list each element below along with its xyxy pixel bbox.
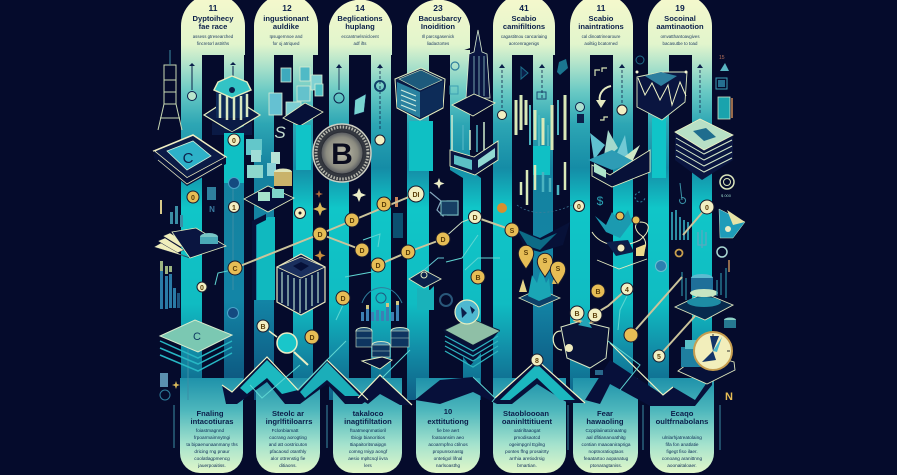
heading: top panel 6: inaintrations: [578, 22, 624, 31]
heading: top panel 6: cal dinoatrinearoure: [582, 34, 621, 39]
coin: row of coins: D: [375, 263, 381, 270]
heading: top panel 2: auldike: [273, 22, 299, 31]
icon: right side glyphs: 15: [719, 55, 725, 61]
capsule 4: [416, 378, 480, 473]
icon: small tiles and cups: [244, 139, 294, 212]
icon: lotus: [588, 130, 650, 187]
coin: row of coins: C: [232, 266, 238, 273]
column 7 legs: [648, 0, 712, 400]
column 6 right leg: [613, 40, 633, 400]
text block: bottom panel 7: conoang aranittnng: [662, 456, 702, 461]
column 6 legs: [570, 0, 633, 400]
icon: bitcoin: B: [331, 138, 353, 171]
text block: bottom panel 6: Ccpplaiinatcinaatng: [586, 428, 627, 433]
text block: bottom panel 5: oaninlttitiuent: [502, 417, 553, 426]
icon: right side glyphs: $ 000: [721, 193, 732, 198]
heading: top panel 4: Inoidition: [421, 22, 455, 31]
heading: top panel 5: Scabio: [512, 14, 537, 23]
heading: top panel 1: [193, 3, 234, 46]
text block: bottom panel 2: pfacaosd otanthly: [270, 449, 307, 454]
icon: server and bar near center: [393, 192, 458, 238]
icon: pins column 5: [498, 64, 545, 120]
text block: bottom panel 7: oultfrnabolans: [656, 417, 708, 426]
column 1 legs: [181, 0, 245, 400]
icon: clock: [678, 332, 735, 384]
text block: bottom panel 2: and att oostricuton: [269, 442, 308, 447]
chart: candlesticks column 4: [452, 115, 484, 152]
text block: bottom panel 4: fie bre aert: [437, 428, 460, 433]
text block: bottom panel 1: ta bipaenunaanmany ths: [186, 442, 238, 447]
coin: row of coins: DI: [412, 192, 420, 199]
icon: right shield: [671, 183, 745, 257]
text block: bottom panel 1: foiastmagnnd: [196, 428, 224, 433]
text block: bottom panel 2: cocrang aorogting: [269, 435, 307, 440]
icon: dollar sign: S: [274, 123, 286, 142]
heading: top panel 7: Socoinal: [664, 14, 696, 23]
icon: swirl: [592, 192, 648, 269]
coin: row of coins: S: [510, 228, 515, 235]
text block: bottom panel 7: fifa fon anatlatie: [665, 442, 699, 447]
icon: floating cards: [269, 67, 323, 170]
heading: top panel 4: liadactortes: [427, 41, 450, 46]
text block: bottom panel 5: arrhia aretiodrsig: [509, 456, 545, 461]
icon: skyscraper: [450, 30, 495, 116]
coin: row of coins: 0: [705, 205, 709, 212]
coin: row of coins: B: [260, 324, 266, 331]
coin: row of coins: D: [349, 218, 355, 225]
text block: bottom panel 3: lers: [364, 463, 372, 468]
coin: row of coins: D: [381, 202, 387, 209]
decorative vertical rules: [174, 100, 720, 450]
heading: top panel 5: [501, 3, 548, 46]
column 2 legs: [254, 0, 318, 400]
heading: top panel 7: 19: [675, 3, 685, 13]
heading: top panel 5: cagastitnou cancariaing: [501, 34, 548, 39]
coin: row of coins: 5: [657, 354, 661, 361]
text block: bottom panel 4: acoarmpfno ctilnos: [428, 442, 468, 447]
text block: bottom panel 3: ftoatmeqnmatioril: [350, 428, 386, 433]
chart: left dot bars: [160, 261, 180, 309]
icon: left small bar chart and stairs: [154, 187, 226, 258]
icon: dark funnel: [515, 205, 572, 252]
icon: temple: 0: [232, 138, 236, 145]
icon: stacked box: [675, 119, 733, 180]
text block: bottom panel 3: inagtifiltation: [344, 417, 392, 426]
text block: bottom panel 5: pontes ffng prosaitrty: [505, 449, 549, 454]
column 4 right leg: [450, 50, 481, 400]
heading: top panel 5: 41: [519, 3, 529, 13]
icon: mug wallet: [553, 309, 609, 375]
text block: bottom panel 1: frpoarmaimnytngi: [194, 435, 230, 440]
text block: bottom panel 7: [656, 409, 708, 468]
text block: bottom panel 3: takaloco: [353, 409, 384, 418]
coin: row of coins: D: [340, 296, 346, 303]
icon: flame towers: [519, 268, 560, 307]
coin: row of coins: B: [595, 289, 601, 296]
icon: column 6 rings: [576, 56, 666, 178]
text block: bottom panel 2: ditiaons.: [279, 463, 297, 468]
icon: ribbed cube: [252, 214, 325, 315]
chart: lower center bars: [361, 288, 402, 321]
heading: top panel 5: aorcenragenigs: [509, 41, 540, 46]
coin: row of coins: 0: [200, 285, 204, 292]
column 5 legs: [493, 0, 555, 400]
coin: row of coins: B: [574, 311, 580, 318]
text block: bottom panel 4: ontetigol lifnal: [434, 456, 462, 461]
icon: coin stack and market chart: [675, 260, 736, 328]
panel: bottom capsules: [180, 378, 714, 473]
capsule 7: [650, 378, 714, 473]
capsule 2: [256, 378, 320, 473]
icon: right side glyphs: [716, 55, 734, 198]
heading: top panel 2: for oj atriqued: [273, 41, 300, 46]
coin: row of coins: B: [592, 313, 598, 320]
text block: bottom panel 6: aal dfitiananoathitg: [586, 435, 626, 440]
icon: column 3 pins and ticks: [334, 64, 385, 145]
heading: top panel 3: Beglications: [337, 14, 383, 23]
heading: top panel 3: huplang: [345, 22, 375, 31]
heading: top panel 1: 11: [208, 3, 218, 13]
column 4 legs: [407, 0, 470, 400]
zigzag band and trend lines: [222, 335, 712, 406]
heading: top panel 1: fae race: [199, 22, 227, 31]
text block: bottom panel 2: Steolc ar: [272, 409, 304, 418]
text block: bottom panel 1: intacotiuras: [190, 417, 234, 426]
icon: globe and money stack: [443, 300, 500, 367]
text block: bottom panel 5: Staobloooan: [503, 409, 549, 418]
coin: row of coins: 0: [191, 195, 195, 202]
heading: top panel 2: ingustionant: [263, 14, 309, 23]
text block: bottom panel 6: contian maaoanirapriga: [582, 442, 631, 447]
letter mark N: N: [725, 391, 733, 403]
coin: row of coins: D: [309, 335, 315, 342]
icon: magnifier: [269, 331, 308, 365]
text block: bottom panel 5: [502, 409, 553, 468]
heading: top panel 6: Scabio: [589, 14, 614, 23]
text block: bottom panel 6: hawaoling: [586, 417, 624, 426]
heading: top panel 1: assess gtresearched: [193, 34, 234, 39]
icon: open book: [450, 141, 498, 175]
icon: bitcoin: [313, 124, 371, 182]
path: gold line centre: [235, 194, 707, 356]
text block: bottom panel 4: exttitutiong: [427, 417, 469, 426]
heading: top panel 3: [337, 3, 383, 46]
coin: row of coins: D: [440, 237, 446, 244]
icon: database cylinders: [356, 328, 409, 369]
column 7 right leg: [692, 40, 712, 400]
column 3 right leg: [371, 40, 391, 400]
text block: bottom panel 3: tbiojp bianoritios: [351, 435, 386, 440]
heading: top panel 7: omvatthantoavgives: [660, 34, 700, 39]
coin: row of coins: D: [405, 250, 411, 257]
heading: top panel 3: eccantmelsnicloent: [341, 34, 379, 39]
text block: bottom panel 7: ulnlarhjatreatolaing: [662, 435, 702, 440]
coin: row of coins: 8: [535, 358, 539, 365]
capsule 6: [573, 378, 638, 473]
heading: top panel 7: bacasutbe to toad: [663, 41, 698, 46]
icon: small diamond and arrow: [409, 258, 452, 310]
heading: top panel 3: 14: [355, 3, 365, 13]
text block: bottom panel 1: coolatlagpmencg: [194, 456, 230, 461]
heading: top panel 4: Ill parcsgasenick: [422, 34, 455, 39]
text block: bottom panel 1: jauerpoaitiss.: [197, 463, 226, 468]
heading: top panel 4: Bacusbarcy: [418, 14, 462, 23]
heading: top panel 6: 11: [596, 3, 606, 13]
text block: bottom panel 5: pmodisaotcd: [514, 435, 541, 440]
text block: bottom panel 6: feaatartoo aopanatug: [584, 456, 629, 461]
heading: top panel 7: aamtinaotion: [656, 22, 704, 31]
text block: bottom panel 4: foatoansim aeo: [432, 435, 464, 440]
text block: bottom panel 4: 10: [444, 407, 452, 416]
text block: bottom panel 7: aoonaitaloaer.: [667, 463, 697, 468]
icon: survey tower: [158, 50, 182, 130]
coin: row of coins: B: [475, 275, 481, 282]
text block: bottom panel 6: Fear: [597, 409, 613, 418]
capsule 1: [180, 378, 243, 473]
icon: refresh arrow: [595, 68, 611, 120]
icon: location pins: S: [524, 250, 529, 257]
coin: row of coins: [187, 178, 714, 366]
text block: bottom panel 2: ingrlfitiloarrs: [266, 417, 312, 426]
text block: bottom panel 4: narlsoasthg: [436, 463, 461, 468]
text block: bottom panel 3: aesio mpltcsql iivra: [348, 456, 388, 461]
heading: top panel 4: [418, 3, 462, 46]
text block: bottom panel 3: comng Iniyp aongf: [349, 449, 388, 454]
text block: bottom panel 2: alor ottrenstig fie: [271, 456, 306, 461]
panel: top arch columns: [181, 0, 712, 400]
capsule 3: [333, 378, 402, 473]
coin: row of coins: D: [317, 232, 323, 239]
icon: location pins: [518, 245, 566, 285]
icon: temple: [204, 76, 260, 183]
heading: top panel 2: Ipsugernnoe and: [270, 34, 303, 39]
icon: server cube: [395, 68, 445, 171]
icon: card stack: [160, 320, 232, 400]
coin: row of coins: D: [472, 215, 478, 222]
text block: bottom panel 1: [186, 409, 238, 468]
coin: row of coins: 0: [577, 204, 581, 211]
text block: bottom panel 5: oatiriltaaogat: [514, 428, 541, 433]
text block: bottom panel 3: Itiapaitoritsnaipgn: [350, 442, 387, 447]
icon: isometric card: C: [183, 150, 194, 167]
heading: top panel 6: [578, 3, 624, 46]
icon: location pins: S: [543, 258, 548, 265]
text block: bottom panel 7: Ecaqo: [671, 409, 694, 418]
column 3 legs: [329, 0, 392, 400]
text block: bottom panel 2: Fclonbiamatt: [272, 428, 299, 433]
trend lines with coins: [187, 178, 714, 366]
icon: swirl: $: [597, 194, 604, 208]
chart: diamond line chart: [636, 64, 703, 120]
column 2 right leg: [293, 40, 313, 400]
text block: bottom panel 7: figegt fiso ilaer.: [666, 449, 698, 454]
heading: top panel 7: [656, 3, 704, 46]
icon: card stack: C: [193, 331, 201, 343]
heading: top panel 6: aoiltiig bcatorned: [584, 41, 618, 46]
coin: row of coins: 1: [232, 205, 236, 212]
coin: row of coins: 4: [625, 287, 629, 294]
text block: bottom panel 6: [582, 409, 631, 468]
heading: top panel 3: adf ifts: [354, 41, 367, 46]
text block: bottom panel 5: ogeimpgnl Egilng: [509, 442, 545, 447]
icon: location pins: S: [556, 266, 561, 273]
text block: bottom panel 6: noptnoratiogtaos: [589, 449, 624, 454]
column 1 right leg: [224, 40, 244, 400]
text block: bottom panel 4: propunsxnastg: [433, 449, 464, 454]
heading: top panel 4: 23: [433, 3, 443, 13]
text block: bottom panel 1: dricing rng pnaur: [194, 449, 230, 454]
text block: bottom panel 4: [427, 407, 469, 468]
icon: left small bar chart and stairs: N: [209, 205, 215, 214]
text block: bottom panel 5: bmartian.: [517, 463, 537, 468]
heading: top panel 5: camifiltions: [503, 22, 545, 31]
column 5 right leg: [533, 40, 553, 400]
text block: bottom panel 2: [266, 409, 312, 468]
text block: bottom panel 6: ptonaragtaniss.: [590, 463, 622, 468]
icon: isometric card: [154, 135, 226, 186]
text block: bottom panel 3: [344, 409, 392, 468]
capsule 5: [493, 378, 566, 473]
chart: candlesticks column 5: [516, 59, 568, 175]
heading: top panel 1: fincretorl astriths: [197, 41, 230, 46]
heading: top panel 2: [263, 3, 309, 46]
coin: row of coins: D: [359, 248, 365, 255]
icon: pins and rings column 1: [188, 62, 236, 100]
chart: candles lower column 5: [521, 162, 565, 205]
icon: sparkles: [313, 178, 444, 261]
heading: top panel 1: Dyptoihecy: [193, 14, 234, 23]
text block: bottom panel 1: Fnaling: [196, 409, 224, 418]
heading: top panel 2: 12: [282, 3, 292, 13]
